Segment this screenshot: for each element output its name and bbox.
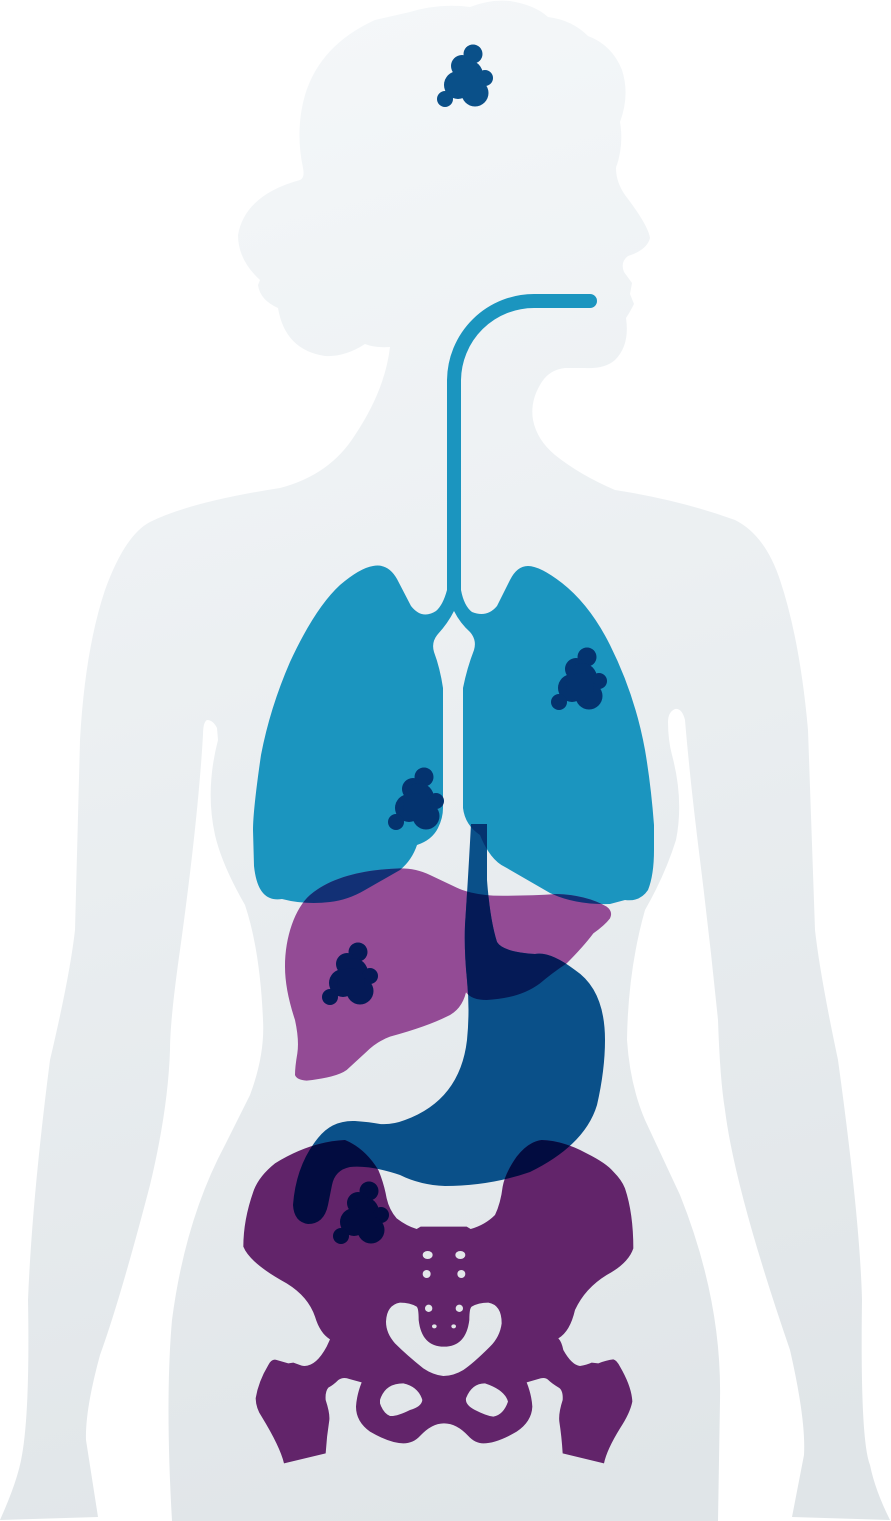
liver (285, 868, 611, 1081)
overlap: liver and lungs (303, 868, 602, 904)
tumor cluster: left lung (388, 768, 444, 830)
hair slit near forehead (616, 163, 626, 170)
tumor cluster: brain (437, 44, 493, 107)
tumor cluster: pelvis (333, 1182, 389, 1244)
stomach (293, 824, 605, 1224)
tumor cluster: right lung (551, 648, 607, 710)
overlap: stomach and pelvis (293, 1140, 570, 1224)
overlap: stomach and liver (464, 892, 566, 1000)
pelvis bone (243, 1140, 633, 1463)
trachea (454, 301, 590, 600)
tumor cluster: liver (322, 942, 378, 1005)
lungs (253, 566, 654, 904)
overlap: stomach and lungs (470, 824, 487, 849)
